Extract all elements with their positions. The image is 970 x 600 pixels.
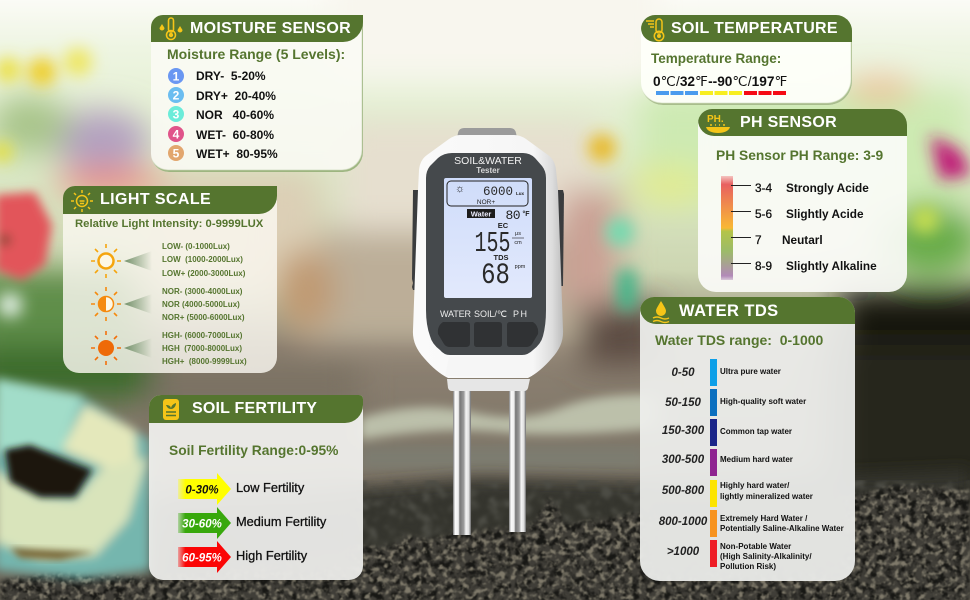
- text: tds range: Water TDS range: 0-1000: [655, 332, 823, 348]
- text: relative light intensity: Relative Light Intensity: 0-9999LUX: [75, 218, 263, 230]
- tds descriptions: Medium hard water: [720, 455, 793, 464]
- lux ranges: HGH (7000-8000Lux): [162, 344, 242, 353]
- heading: light scale: [63, 186, 277, 214]
- heading: moisture sensor: MOISTURE SENSOR: [190, 20, 351, 37]
- tds ranges: 300-500: [662, 454, 704, 466]
- lcd screen: cm: [514, 240, 522, 246]
- device title: [454, 155, 522, 175]
- tds descriptions: Extremely Hard Water /: [720, 514, 807, 523]
- ph rows: 3-4: [755, 181, 772, 195]
- level list: DRY+ 20-40%: [196, 89, 276, 103]
- dark soil and gravel: [0, 470, 970, 600]
- metal probes: [453, 388, 526, 535]
- tds ranges: 150-300: [662, 425, 704, 437]
- tds descriptions: [720, 367, 844, 571]
- soil tester device: [412, 128, 564, 535]
- lcd screen: 155: [475, 228, 510, 260]
- ph rows: Slightly Acide: [786, 207, 864, 221]
- lcd screen: °F: [522, 210, 530, 218]
- flower pot: [0, 378, 150, 578]
- lcd screen: TDS: [494, 253, 508, 262]
- temperature colour bar: [656, 91, 786, 95]
- tds ranges: 500-800: [662, 485, 704, 497]
- heading: water tds: [640, 297, 855, 324]
- tds descriptions: Common tap water: [720, 427, 792, 436]
- icon: water drop: [652, 301, 670, 324]
- text: ph range: PH Sensor PH Range: 3-9: [716, 148, 883, 163]
- ph rows: [755, 181, 877, 273]
- heading: light scale: LIGHT SCALE: [100, 191, 211, 208]
- level list: 4: [173, 128, 180, 142]
- side grips: [412, 190, 564, 290]
- device title: Tester: [476, 166, 500, 175]
- heading: moisture sensor: [151, 15, 363, 42]
- ph gradient scale: [721, 176, 751, 280]
- lcd screen: ☼: [455, 183, 465, 195]
- arrow: low fertility: 0-30%: [185, 484, 219, 496]
- text: low fertility: Low Fertility: [236, 480, 304, 495]
- ph rows: Strongly Acide: [786, 181, 869, 195]
- lux ranges: LOW+ (2000-3000Lux): [162, 269, 245, 278]
- heading: ph sensor: PH SENSOR: [740, 114, 837, 131]
- lcd screen: 68: [481, 259, 510, 293]
- panel: ph sensor: [698, 109, 907, 292]
- icon: low light sun: [91, 244, 150, 278]
- level list: [168, 68, 278, 161]
- lcd screen: ppm: [515, 264, 526, 270]
- lux ranges: NOR (4000-5000Lux): [162, 300, 240, 309]
- lcd screen: 80: [506, 208, 520, 223]
- panel: moisture sensor: [151, 15, 363, 172]
- panel: soil temperature: [641, 15, 852, 105]
- arrow: medium fertility: 30-60%: [182, 518, 222, 530]
- lux ranges: HGH- (6000-7000Lux): [162, 331, 242, 340]
- text: soil fertility range: Soil Fertility Range:0-95%: [169, 443, 338, 458]
- tds descriptions: High-quality soft water: [720, 397, 806, 406]
- button labels: [440, 309, 527, 319]
- red flower: [0, 192, 52, 280]
- lcd screen: Water: [471, 210, 491, 218]
- lux ranges: NOR- (3000-4000Lux): [162, 287, 242, 296]
- lcd screen: EC: [498, 221, 509, 230]
- ph rows: 7: [755, 233, 762, 247]
- ph rows: 8-9: [755, 259, 772, 273]
- button labels: SOIL/℃: [474, 309, 507, 319]
- heading: soil fertility: SOIL FERTILITY: [192, 400, 317, 417]
- level list: NOR 40-60%: [196, 108, 274, 122]
- level list: 3: [173, 108, 180, 122]
- icon: normal light sun: [91, 287, 150, 321]
- icon: ph bowl: PH.: [707, 114, 724, 125]
- arrow: low fertility: [178, 473, 231, 505]
- lcd screen: NOR+: [477, 199, 495, 206]
- heading: ph sensor: [698, 109, 907, 136]
- lux ranges: HGH+ (8000-9999Lux): [162, 357, 247, 366]
- lcd screen: μs: [515, 231, 521, 237]
- dark face: [426, 153, 546, 355]
- button labels: P H: [513, 309, 527, 319]
- panel: light scale: [63, 186, 277, 373]
- white casing: [413, 135, 563, 378]
- lcd screen: 6000: [483, 185, 513, 199]
- level list: 2: [173, 88, 180, 102]
- lcd screen: Lux: [516, 191, 524, 196]
- heading: soil fertility: [149, 395, 363, 423]
- icon: moisture thermometer: [160, 17, 182, 40]
- top button: [456, 128, 518, 142]
- tds descriptions: (High Salinity-Alkalinity/: [720, 552, 812, 561]
- lux ranges: NOR+ (5000-6000Lux): [162, 313, 244, 322]
- arrow: high fertility: 60-95%: [182, 552, 222, 564]
- heading: soil temperature: SOIL TEMPERATURE: [671, 20, 838, 37]
- tds descriptions: Pollution Risk): [720, 562, 776, 571]
- icon: high light sun: [91, 331, 150, 365]
- tds descriptions: Non-Potable Water: [720, 542, 791, 551]
- tds colour bars: [710, 359, 717, 567]
- button labels: WATER: [440, 309, 472, 319]
- tds ranges: 50-150: [665, 397, 701, 409]
- lux ranges: LOW (1000-2000Lux): [162, 255, 243, 264]
- level list: 5: [173, 146, 180, 160]
- ph rows: Neutarl: [782, 233, 823, 247]
- ph rows: 5-6: [755, 207, 772, 221]
- icon: ph bowl: [706, 114, 730, 133]
- casing lower neck: [445, 357, 532, 391]
- tds descriptions: lightly mineralized water: [720, 492, 813, 501]
- tds ranges: 800-1000: [659, 516, 707, 528]
- text: moisture range: Moisture Range (5 Levels):: [167, 46, 345, 62]
- icon: thermometer: [646, 18, 664, 42]
- text: medium fertility: Medium Fertility: [236, 514, 326, 529]
- lux ranges: [162, 242, 247, 366]
- icon: fertilizer bag: [163, 399, 179, 420]
- text: high fertility: High Fertility: [236, 548, 307, 563]
- level list: WET- 60-80%: [196, 128, 274, 142]
- text: temperature range: Temperature Range:: [651, 51, 781, 66]
- tds ranges: [658, 367, 708, 558]
- arrow: high fertility: [178, 541, 231, 573]
- ph rows: Slightly Alkaline: [786, 259, 877, 273]
- mid ground soil band: [360, 395, 660, 470]
- panel: water tds: [640, 297, 855, 581]
- tds descriptions: Potentially Saline-Alkaline Water: [720, 524, 844, 533]
- icon: light bulb sun: [71, 190, 93, 212]
- level list: 1: [173, 70, 180, 84]
- arrow: medium fertility: [178, 507, 231, 539]
- buttons: [438, 322, 538, 347]
- panel: soil fertility: [149, 395, 363, 580]
- lux ranges: LOW- (0-1000Lux): [162, 242, 230, 251]
- tds descriptions: Ultra pure water: [720, 367, 781, 376]
- heading: water tds: WATER TDS: [679, 302, 779, 320]
- device title: SOIL&WATER: [454, 155, 522, 167]
- heading: soil temperature: [641, 15, 852, 42]
- text: temperature values: 0℃/32℉--90℃/197℉: [653, 74, 787, 89]
- tds ranges: >1000: [667, 546, 699, 558]
- tds ranges: 0-50: [671, 367, 695, 379]
- lcd screen: [444, 178, 532, 298]
- tds descriptions: Highly hard water/: [720, 481, 789, 490]
- level list: DRY- 5-20%: [196, 69, 266, 83]
- level list: WET+ 80-95%: [196, 147, 278, 161]
